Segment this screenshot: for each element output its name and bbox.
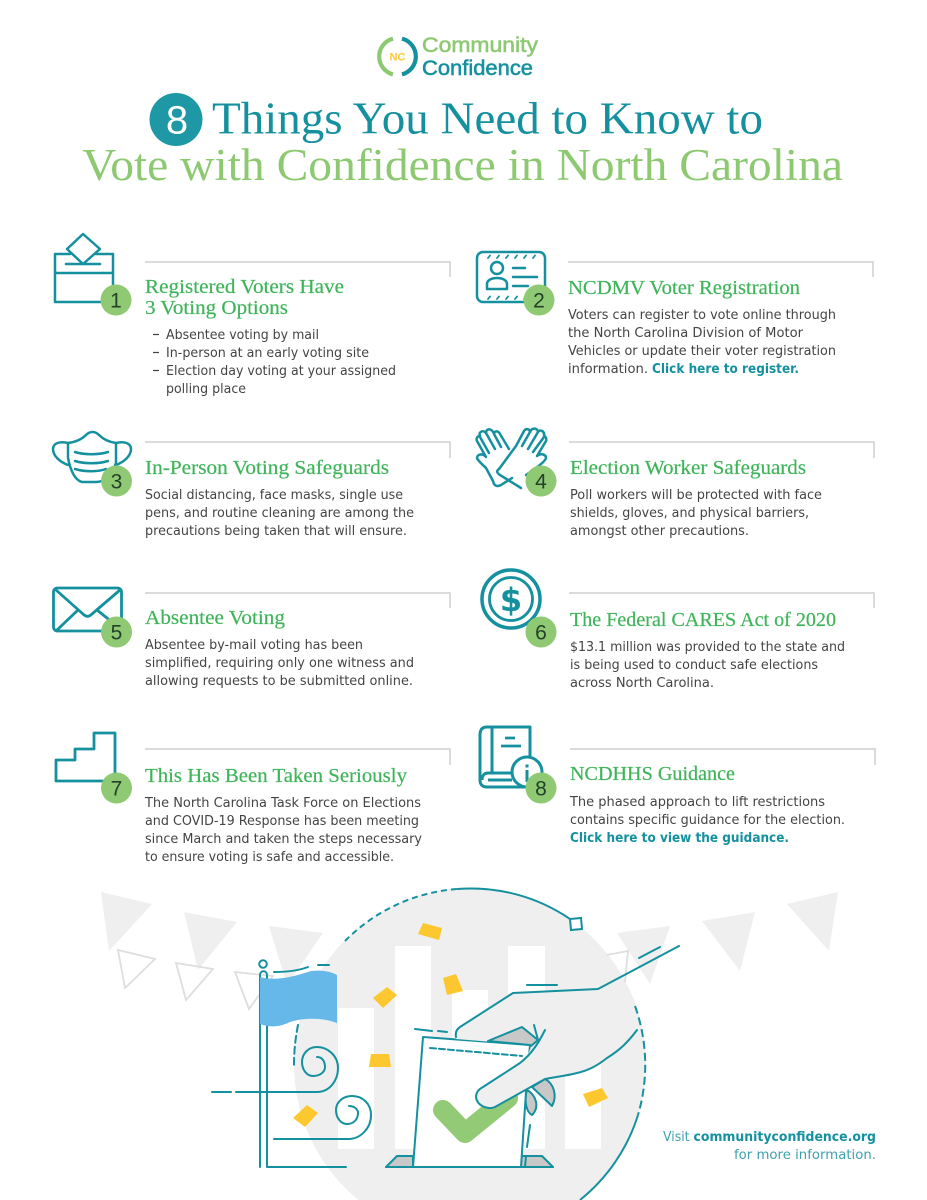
icon: dollar coin: 6 bbox=[535, 622, 547, 644]
panel: item 8 NCDHHS guidance: The phased approach to lift restrictions bbox=[569, 795, 825, 810]
panel: item 8 NCDHHS guidance bbox=[480, 727, 875, 846]
panel: item 1 registered voters bbox=[55, 234, 450, 397]
grey background circle bbox=[294, 888, 646, 1200]
icon: ID card bbox=[477, 252, 554, 316]
panel: item 2 NCDMV voter registration bbox=[477, 252, 873, 377]
panel: item 6 federal CARES act: $13.1 million was provided to the state and bbox=[570, 640, 845, 655]
panel: item 7 taken seriously: to ensure voting is safe and accessible. bbox=[145, 850, 394, 865]
confetti bbox=[293, 923, 608, 1127]
panel: item 6 federal CARES act: is being used to conduct safe elections bbox=[570, 658, 818, 673]
panel: item 2 NCDMV voter registration: NCDMV Voter Registration bbox=[568, 278, 800, 299]
panel: item 1 registered voters: In-person at an early voting site bbox=[166, 346, 369, 361]
folded hand leaves bbox=[526, 1079, 555, 1115]
icon: ballot box: 1 bbox=[110, 290, 122, 312]
panel: item 5 absentee voting: Absentee Voting bbox=[145, 608, 285, 629]
white bar chart bbox=[338, 946, 601, 1149]
panel: item 1 registered voters: 3 Voting Options bbox=[145, 298, 288, 319]
panel: item 8 NCDHHS guidance: NCDHHS Guidance bbox=[570, 764, 735, 785]
icon: gloves bbox=[477, 429, 556, 496]
flag and pole bbox=[259, 960, 346, 1167]
icon: number 8 badge: 8 bbox=[166, 98, 188, 142]
panel: item 4 election worker safeguards: shields, gloves, and physical barriers, bbox=[570, 506, 809, 521]
panel: item 6 federal CARES act: across North Carolina. bbox=[570, 676, 714, 691]
icon: dollar coin bbox=[482, 570, 556, 648]
panel: item 2 NCDMV voter registration: Vehicles or update their voter registration bbox=[568, 344, 836, 359]
icon: gloves: 4 bbox=[535, 470, 547, 494]
panel: item 4 election worker safeguards: Poll workers will be protected with face bbox=[570, 488, 822, 503]
icon: envelope: 5 bbox=[111, 622, 122, 644]
panel: item 1 registered voters: Registered Voters Have bbox=[145, 277, 344, 298]
panel: item 5 absentee voting: Absentee by-mail voting has been bbox=[145, 638, 363, 653]
icon: envelope bbox=[54, 588, 132, 648]
circle outline arcs bbox=[345, 888, 645, 1200]
panel: item 3 in-person voting safeguards bbox=[53, 432, 450, 539]
panel: item 3 in-person voting safeguards: pens, and routine cleaning are among the bbox=[145, 506, 414, 521]
ballot paper with checkmark bbox=[413, 1029, 530, 1167]
icon: ballot box bbox=[55, 234, 132, 316]
icon: dollar coin: $ bbox=[500, 581, 522, 619]
footer call to action bbox=[663, 1129, 876, 1163]
logo: Community Confidence: Confidence bbox=[422, 56, 533, 80]
ballot box base bbox=[386, 1156, 553, 1167]
panel: item 1 registered voters: Absentee voting by mail bbox=[166, 328, 319, 343]
illustration: voting celebration bbox=[101, 888, 838, 1200]
panel: item 7 taken seriously: since March and taken the steps necessary bbox=[145, 832, 422, 847]
icon: face mask: 3 bbox=[111, 470, 122, 494]
panel: item 1 registered voters: polling place bbox=[166, 382, 246, 397]
panel: item 3 in-person voting safeguards: precautions being taken that will ensure. bbox=[145, 524, 407, 539]
panel: item 4 election worker safeguards bbox=[477, 429, 874, 539]
icon: steps bbox=[56, 733, 132, 804]
panel: item 2 NCDMV voter registration: information. bbox=[568, 362, 648, 377]
footer call to action: Visit communityconfidence.org bbox=[663, 1129, 876, 1145]
icon: number 8 badge bbox=[150, 93, 202, 146]
hand bbox=[456, 946, 679, 1108]
wind swirls bbox=[212, 965, 371, 1139]
title: Vote with Confidence in North Carolina bbox=[82, 140, 843, 190]
panel: item 5 absentee voting: simplified, requiring only one witness and bbox=[145, 656, 414, 671]
logo: Community Confidence: NC bbox=[390, 52, 405, 64]
panel: item 2 NCDMV voter registration: Voters can register to vote online through bbox=[568, 308, 836, 323]
footer call to action: for more information. bbox=[734, 1147, 876, 1163]
title: Things You Need to Know to bbox=[212, 94, 763, 144]
panel: item 3 in-person voting safeguards: Social distancing, face masks, single use bbox=[145, 488, 403, 503]
panel: item 4 election worker safeguards: Election Worker Safeguards bbox=[570, 458, 806, 479]
panel: item 4 election worker safeguards: amongst other precautions. bbox=[570, 524, 749, 539]
logo: Community Confidence bbox=[379, 33, 538, 80]
panel: item 8 NCDHHS guidance: contains specific guidance for the election. bbox=[570, 813, 845, 828]
icon: book with info: 8 bbox=[535, 778, 547, 800]
panel: item 7 taken seriously: The North Carolina Task Force on Elections bbox=[144, 796, 421, 811]
logo: Community Confidence: Community bbox=[422, 33, 538, 57]
panel: item 7 taken seriously: and COVID-19 Response has been meeting bbox=[145, 814, 419, 829]
panel: item 6 federal CARES act: The Federal CARES Act of 2020 bbox=[570, 610, 836, 631]
panel: item 6 federal CARES act bbox=[482, 570, 874, 691]
panel: item 8 NCDHHS guidance: Click here to view the guidance. bbox=[570, 831, 789, 846]
icon: ID card: 2 bbox=[533, 290, 545, 312]
icon: steps: 7 bbox=[111, 778, 122, 800]
panel: item 2 NCDMV voter registration: Click here to register. bbox=[652, 362, 799, 377]
panel: item 7 taken seriously bbox=[56, 733, 450, 865]
folded ballot corner bbox=[488, 1027, 538, 1046]
title bbox=[82, 93, 843, 190]
panel: item 7 taken seriously: This Has Been Taken Seriously bbox=[145, 766, 407, 787]
panel: item 5 absentee voting bbox=[54, 588, 450, 689]
icon: face mask bbox=[53, 432, 132, 496]
icon: book with info bbox=[480, 727, 556, 804]
panel: item 3 in-person voting safeguards: In-Person Voting Safeguards bbox=[145, 458, 389, 479]
panel: item 2 NCDMV voter registration: the North Carolina Division of Motor bbox=[568, 326, 804, 341]
panel: item 5 absentee voting: allowing requests to be submitted online. bbox=[145, 674, 413, 689]
bunting pennants bbox=[101, 892, 838, 1009]
panel: item 1 registered voters: Election day voting at your assigned bbox=[166, 364, 396, 379]
